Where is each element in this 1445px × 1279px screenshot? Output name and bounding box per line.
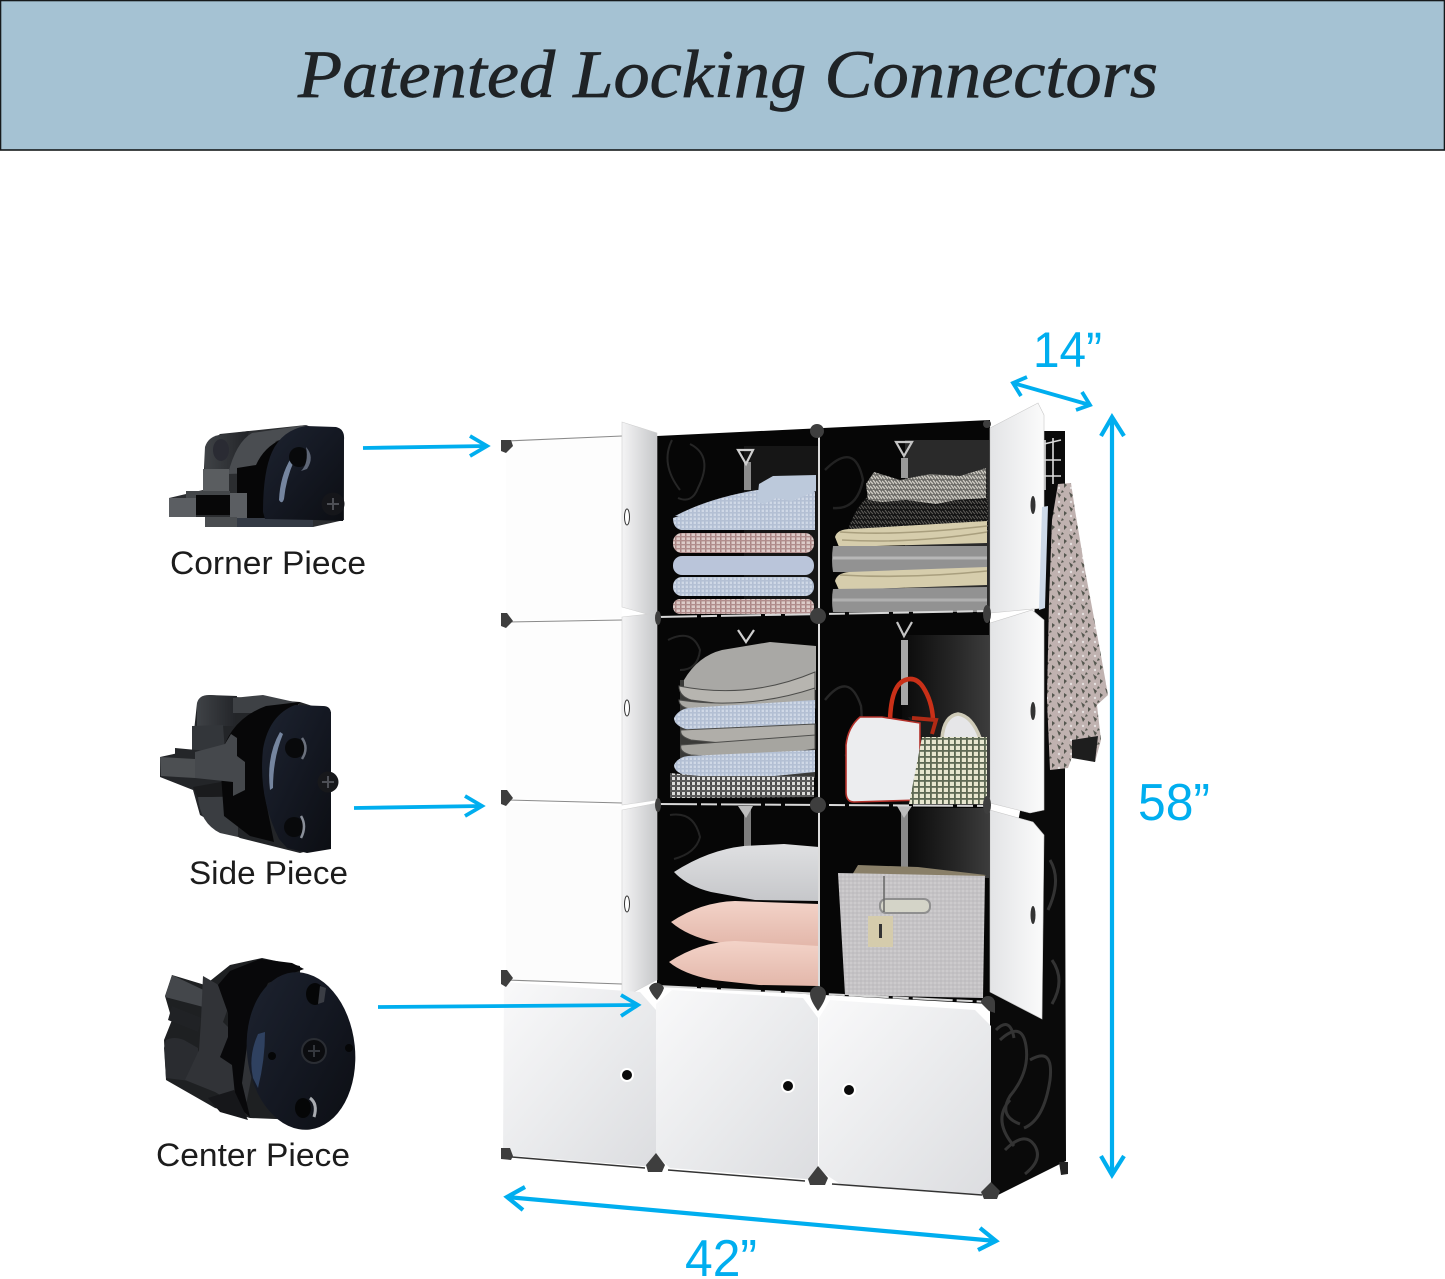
white handbag (846, 717, 920, 802)
compartment: middle right, handbags (825, 622, 989, 805)
arrow: 42 inch width (507, 1187, 996, 1250)
cream handle (942, 714, 980, 738)
arrow: center piece pointer (378, 995, 638, 1016)
compartment: top right, blankets and knit (825, 440, 989, 612)
arrow: side piece pointer (354, 796, 482, 816)
title banner (0, 0, 1444, 150)
connector nodes on cabinet (501, 420, 1068, 1199)
label: corner piece: Corner Piece (170, 545, 366, 581)
compartment: bottom left, pillows (669, 806, 819, 986)
hanging garment (1039, 483, 1108, 770)
arrow: 58 inch height (1101, 417, 1124, 1175)
connector: corner piece (169, 425, 344, 527)
door: bottom right (819, 1000, 991, 1195)
storage cabinet (501, 403, 1108, 1199)
open door edge: bottom (622, 803, 657, 998)
red handbag handle (890, 679, 933, 720)
label: center piece: Center Piece (156, 1137, 350, 1173)
compartment: middle left, stacked sweaters (668, 630, 816, 798)
arrow: 14 inch depth (1013, 377, 1090, 410)
dimension: 14 inches: 14” (1033, 322, 1102, 378)
right door: top (990, 403, 1044, 613)
bottom doors (503, 982, 991, 1195)
open door edge: middle (622, 613, 657, 805)
interior back (657, 420, 990, 1004)
door: bottom left (503, 982, 656, 1167)
dimension: 58 inches: 58” (1138, 774, 1210, 832)
arrow: corner piece pointer (363, 436, 487, 456)
shelves and centre post (657, 436, 990, 1002)
connector: side piece (160, 695, 338, 853)
connector: center piece (164, 958, 363, 1135)
label: side piece: Side Piece (189, 855, 348, 891)
banner background (0, 0, 1444, 150)
right door: middle (990, 610, 1044, 813)
title: Patented Locking Connectors (297, 36, 1158, 112)
door: top left (506, 437, 622, 621)
compartment: top left, folded shirts (668, 440, 819, 614)
door: lower-middle left (506, 803, 622, 985)
right side panel (990, 431, 1066, 1199)
plaid handbag (909, 737, 987, 804)
compartment: bottom right, linen box (838, 806, 989, 998)
door: bottom centre (656, 990, 818, 1180)
left white doors (506, 422, 657, 998)
door: upper-middle left (506, 620, 622, 803)
open door edge: top (622, 422, 657, 617)
right open doors (990, 403, 1044, 1019)
right door: bottom (990, 810, 1044, 1019)
